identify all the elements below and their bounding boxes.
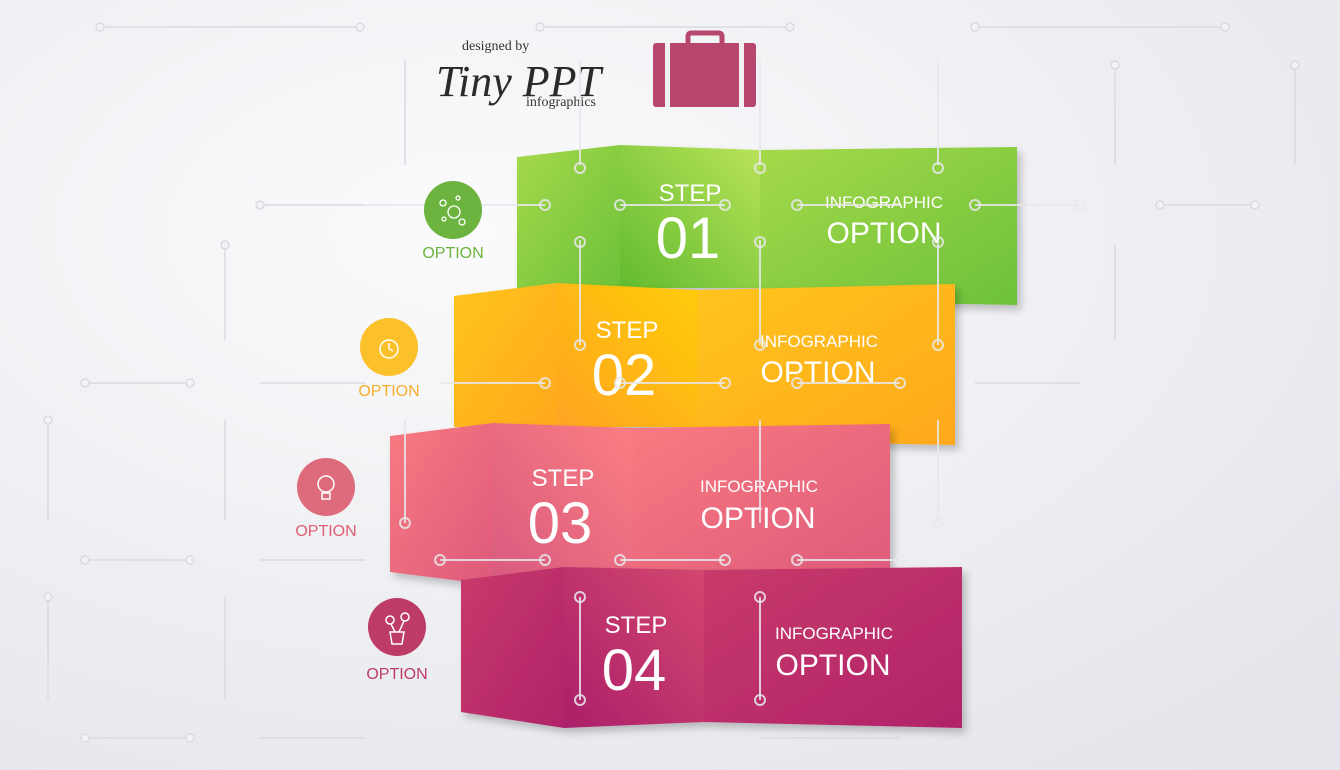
band: step 03 pink: 03 <box>528 491 592 556</box>
band: step 02 yellow: OPTION <box>760 356 876 389</box>
icon: briefcase <box>653 33 756 107</box>
icon: pink option circle: OPTION <box>295 523 357 540</box>
band: step 01 green: 01 <box>656 206 720 271</box>
band: step 04 magenta: OPTION <box>775 649 891 682</box>
logo: designed by TinyPPT: Tiny PPT <box>436 57 605 106</box>
icon: magenta option circle: OPTION <box>366 666 428 683</box>
band: step 03 pink: INFOGRAPHIC <box>700 477 818 496</box>
band: step 02 yellow <box>454 283 955 445</box>
band: step 01 green: INFOGRAPHIC <box>825 193 943 212</box>
icon: green option circle <box>422 181 484 262</box>
logo: designed by TinyPPT <box>436 39 605 110</box>
logo: designed by TinyPPT: designed by <box>462 39 529 54</box>
band: step 03 pink: OPTION <box>700 502 816 535</box>
band: step 04 magenta: INFOGRAPHIC <box>775 624 893 643</box>
band: step 02 yellow: 02 <box>592 343 656 408</box>
band: step 01 green: OPTION <box>826 217 942 250</box>
band: step 04 magenta <box>461 567 962 728</box>
band: step 04 magenta: STEP <box>605 612 667 639</box>
band: step 02 yellow: INFOGRAPHIC <box>760 332 878 351</box>
band: step 01 green: STEP <box>659 180 721 207</box>
icon: yellow option circle <box>358 318 420 400</box>
band: step 01 green <box>517 145 1017 305</box>
icon: green option circle: OPTION <box>422 245 484 262</box>
band: step 04 magenta: 04 <box>602 638 666 703</box>
band: step 03 pink: STEP <box>532 465 594 492</box>
icon: yellow option circle: OPTION <box>358 383 420 400</box>
icon: magenta option circle <box>366 598 428 683</box>
logo: designed by TinyPPT: infographics <box>526 95 596 110</box>
band: step 02 yellow: STEP <box>596 317 658 344</box>
band: step 03 pink <box>390 423 890 585</box>
icon: pink option circle <box>295 458 357 540</box>
